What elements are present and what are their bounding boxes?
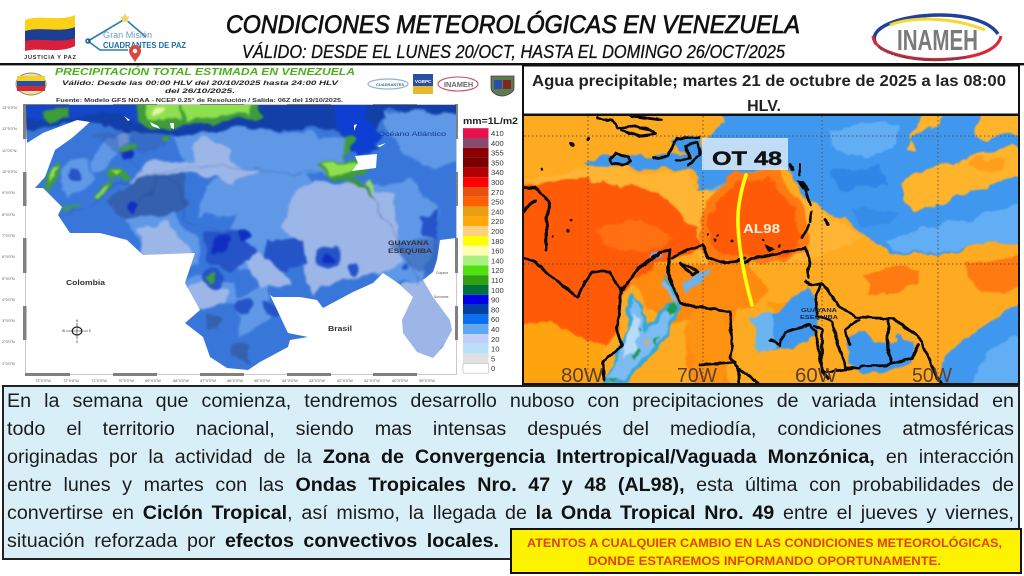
- longitude axis labels: 69°0'0"W: [145, 379, 161, 383]
- map validity text: [62, 80, 339, 95]
- map frame: [23, 104, 458, 376]
- map heading: PRECIPITACIÓN TOTAL ESTIMADA EN VENEZUELA: [55, 65, 355, 78]
- longitude labels: 80W: [561, 365, 603, 387]
- longitude axis labels: 66°0'0"W: [227, 379, 243, 383]
- legend: rainfall colour scale: 350: [491, 158, 504, 167]
- intense blue clusters: [69, 169, 438, 318]
- wave axis: tropical wave 48: [738, 175, 752, 305]
- legend: rainfall colour scale: 240: [491, 207, 504, 216]
- panel: weekly forecast text: [2, 385, 1020, 560]
- latitude axis labels: 2°0'0"N: [2, 340, 15, 344]
- map validity text: del 26/10/2025.: [165, 88, 235, 95]
- icon: compass rose: [62, 319, 91, 344]
- callout: alert: DONDE ESTAREMOS INFORMANDO OPORTUNAMENTE.: [588, 556, 941, 568]
- state borders: [60, 150, 420, 285]
- dotted graticule: [524, 116, 1018, 384]
- legend: rainfall colour scale: 100: [491, 286, 504, 295]
- legend: rainfall colour scale: 10: [491, 345, 499, 354]
- panel: weekly forecast text: situación reforzada por efectos convectivos locales.: [7, 530, 499, 552]
- legend: rainfall colour scale: mm=1L/m2: [463, 116, 518, 126]
- agency logos row: VGBPC: [415, 79, 432, 84]
- logo: Venezuelan flag, Justicia y Paz: [24, 15, 76, 61]
- panel: weekly forecast text: originadas por la actividad de la Zona de Convergencia Intertropical/Vaguada Monzónica, en interacción: [7, 446, 1014, 468]
- latitude axis labels: [2, 106, 17, 366]
- longitude axis labels: 59°0'0"W: [419, 379, 435, 383]
- light blue rainfall areas: [60, 108, 470, 340]
- Guyana and Amazon blue: [770, 286, 819, 351]
- label: Guayana Esequiba: [800, 308, 838, 320]
- latitude axis labels: 13°0'0"N: [2, 106, 17, 110]
- map validity text: Válido: Desde las 00:00 HLV del 20/10/2025 hasta 24:00 HLV: [62, 80, 339, 87]
- panel: precipitable water heading: [523, 66, 1019, 115]
- legend: rainfall colour scale: 200: [491, 227, 504, 236]
- longitude axis labels: 67°0'0"W: [200, 379, 216, 383]
- latitude axis labels: 4°0'0"N: [2, 298, 15, 302]
- icon: compass rose: E: [89, 329, 91, 333]
- logo: Gran Misión Cuadrantes de Paz: [86, 13, 186, 62]
- longitude axis labels: 62°0'0"W: [337, 379, 353, 383]
- logo: Venezuelan flag, Justicia y Paz: JUSTICIA Y PAZ: [24, 55, 76, 61]
- legend: rainfall colour scale: [463, 116, 518, 373]
- longitude axis labels: 64°0'0"W: [282, 379, 298, 383]
- latitude axis labels: 10°0'0"N: [2, 170, 17, 174]
- latitude axis labels: 6°0'0"N: [2, 255, 15, 259]
- latitude axis labels: 1°0'0"N: [2, 362, 15, 366]
- logo: INAMEH: [872, 13, 1002, 62]
- longitude labels: 70W: [677, 365, 717, 387]
- map labels: countries and regions: Colombia: [66, 280, 105, 287]
- longitude axis labels: 73°0'0"W: [35, 379, 51, 383]
- icon: compass rose: W: [62, 329, 65, 333]
- panel: total precipitation map: [0, 65, 522, 395]
- Colombian Andes dry band: [604, 273, 681, 385]
- longitude axis labels: 61°0'0"W: [364, 379, 380, 383]
- Caribbean blue patches: [587, 154, 702, 168]
- core around AL98: [700, 172, 812, 262]
- agency logos row: [368, 74, 514, 96]
- icon: compass rose: N: [76, 319, 79, 323]
- Atlantic blue dry air: [690, 100, 1024, 255]
- icon: compass rose: S: [76, 340, 78, 344]
- map labels: countries and regions: Brasil: [328, 326, 352, 333]
- legend: rainfall colour scale: 5: [491, 354, 495, 363]
- map labels: countries and regions: Océano Atlántico: [378, 131, 447, 138]
- legend: rainfall colour scale: 60: [491, 315, 499, 324]
- longitude axis labels: 71°0'0"W: [91, 379, 107, 383]
- logo: Gran Misión Cuadrantes de Paz: CUADRANTES DE PAZ: [103, 40, 186, 50]
- agency logos row: CUADRANTES: [376, 82, 404, 87]
- Atlantic orange moist patches: [903, 145, 1024, 210]
- longitude axis labels: 63°0'0"W: [309, 379, 325, 383]
- dark slate high rainfall areas: [95, 125, 438, 362]
- callout: alert: [510, 528, 1022, 574]
- longitude axis labels: 65°0'0"W: [254, 379, 270, 383]
- panel: precipitable water heading: Agua precipitable; martes 21 de octubre de 2025 a las 08:00: [532, 73, 1006, 90]
- panel: weekly forecast text: todo el territorio nacional, siendo mas intensas después del mediodía, condiciones atmosféricas: [7, 418, 1014, 440]
- legend: rainfall colour scale: 355: [491, 149, 504, 158]
- agency logos row: INAMEH: [444, 80, 473, 89]
- panel: weekly forecast text: entre lunes y martes con las Ondas Tropicales Nro. 47 y 48 (AL98), esta última con probabilidades de: [7, 474, 1014, 496]
- logo: Gran Misión Cuadrantes de Paz: Gran Misión: [103, 30, 152, 41]
- north coast orange: [630, 262, 770, 398]
- longitude axis labels: [35, 379, 435, 383]
- legend: rainfall colour scale: 160: [491, 247, 504, 256]
- legend: rainfall colour scale: 410: [491, 129, 504, 138]
- longitude axis labels: 72°0'0"W: [63, 379, 79, 383]
- legend: rainfall colour scale: 120: [491, 266, 504, 275]
- panel: precipitable water map: [522, 116, 1020, 385]
- latitude axis labels: 11°0'0"N: [2, 149, 17, 153]
- legend: rainfall colour scale: 400: [491, 139, 504, 148]
- Caribbean islands: [124, 116, 386, 171]
- precipitation field over Venezuela: [26, 105, 456, 370]
- panel: weekly forecast text: convertirse en Ciclón Tropical, así mismo, la llegada de la Onda Tropical Nro. 49 entre el jueves y viernes,: [7, 502, 1014, 524]
- lower-right blue: [937, 304, 1018, 383]
- legend: rainfall colour scale: 220: [491, 217, 504, 226]
- icon: Venezuela coat of arms: [16, 73, 46, 95]
- legend: rainfall colour scale: 110: [491, 276, 503, 285]
- legend: rainfall colour scale: 20: [491, 335, 499, 344]
- latitude axis labels: 7°0'0"N: [2, 234, 15, 238]
- legend: rainfall colour scale: 180: [491, 237, 504, 246]
- moisture field: [524, 116, 1018, 383]
- longitude labels: 50W: [912, 365, 952, 387]
- latitude axis labels: 5°0'0"N: [2, 277, 15, 281]
- legend: rainfall colour scale: 300: [491, 178, 504, 187]
- callout: alert: ATENTOS A CUALQUIER CAMBIO EN LAS CONDICIONES METEOROLÓGICAS,: [527, 537, 1002, 550]
- legend: rainfall colour scale: 80: [491, 305, 499, 314]
- pale orange band: [510, 166, 862, 262]
- coastlines and borders: [523, 116, 942, 384]
- map labels: countries and regions: [66, 131, 449, 333]
- longitude axis labels: 68°0'0"W: [173, 379, 189, 383]
- latitude axis labels: 8°0'0"N: [2, 213, 15, 217]
- South American orange patches: [684, 320, 734, 366]
- panel: weekly forecast text: En la semana que comienza, tendremos desarrollo nuboso con precipitaciones de variada intensidad en: [7, 390, 1014, 412]
- map labels: countries and regions: Guyana: [436, 271, 448, 275]
- longitude axis labels: 60°0'0"W: [392, 379, 408, 383]
- map source text: Fuente: Modelo GFS NOAA - NCEP 0.25° de Resolución / Salida: 06Z del 19/10/2025.: [56, 98, 344, 104]
- legend: rainfall colour scale: 0: [491, 364, 495, 373]
- label: Guayana Esequiba: ESEQUIBA: [800, 315, 839, 321]
- label: OT 48: OT 48: [712, 149, 782, 170]
- longitude axis labels: 70°0'0"W: [118, 379, 134, 383]
- map labels: countries and regions: ESEQUIBA: [388, 248, 432, 255]
- label: OT 48: [702, 138, 788, 170]
- legend: rainfall colour scale: 250: [491, 198, 504, 207]
- legend: rainfall colour scale: 340: [491, 168, 504, 177]
- latitude axis labels: 12°0'0"N: [2, 127, 17, 131]
- northern sea heavy rainfall band: [26, 105, 456, 151]
- legend: rainfall colour scale: 140: [491, 256, 504, 265]
- map labels: countries and regions: GUAYANA: [388, 240, 429, 247]
- longitude labels: 60W: [795, 365, 837, 387]
- latitude axis labels: 9°0'0"N: [2, 191, 15, 195]
- map labels: countries and regions: Suriname: [434, 295, 449, 299]
- legend: rainfall colour scale: 90: [491, 296, 499, 305]
- logo: INAMEH: INAMEH: [897, 25, 978, 57]
- latitude axis labels: 3°0'0"N: [2, 319, 15, 323]
- subtitle: validity dates: VÁLIDO: DESDE EL LUNES 20/OCT, HASTA EL DOMINGO 26/OCT/2025: [242, 42, 786, 62]
- legend: rainfall colour scale: 40: [491, 325, 499, 334]
- label: Guayana Esequiba: GUAYANA: [801, 308, 838, 314]
- green rainfall patches: [42, 95, 375, 287]
- legend: rainfall colour scale: 270: [491, 188, 504, 197]
- longitude labels: [562, 368, 952, 382]
- label: AL98: AL98: [743, 221, 780, 236]
- logo: INAMEH: INSTITUTO NACIONAL DE METEOROLOGÍA E HIDROLOGÍA: [878, 46, 967, 62]
- pale blue low rainfall areas: [118, 128, 460, 365]
- red-orange moist core west: [510, 178, 700, 347]
- title: CONDICIONES METEOROLÓGICAS EN VENEZUELA: [226, 10, 800, 39]
- panel: precipitable water heading: HLV.: [747, 98, 781, 115]
